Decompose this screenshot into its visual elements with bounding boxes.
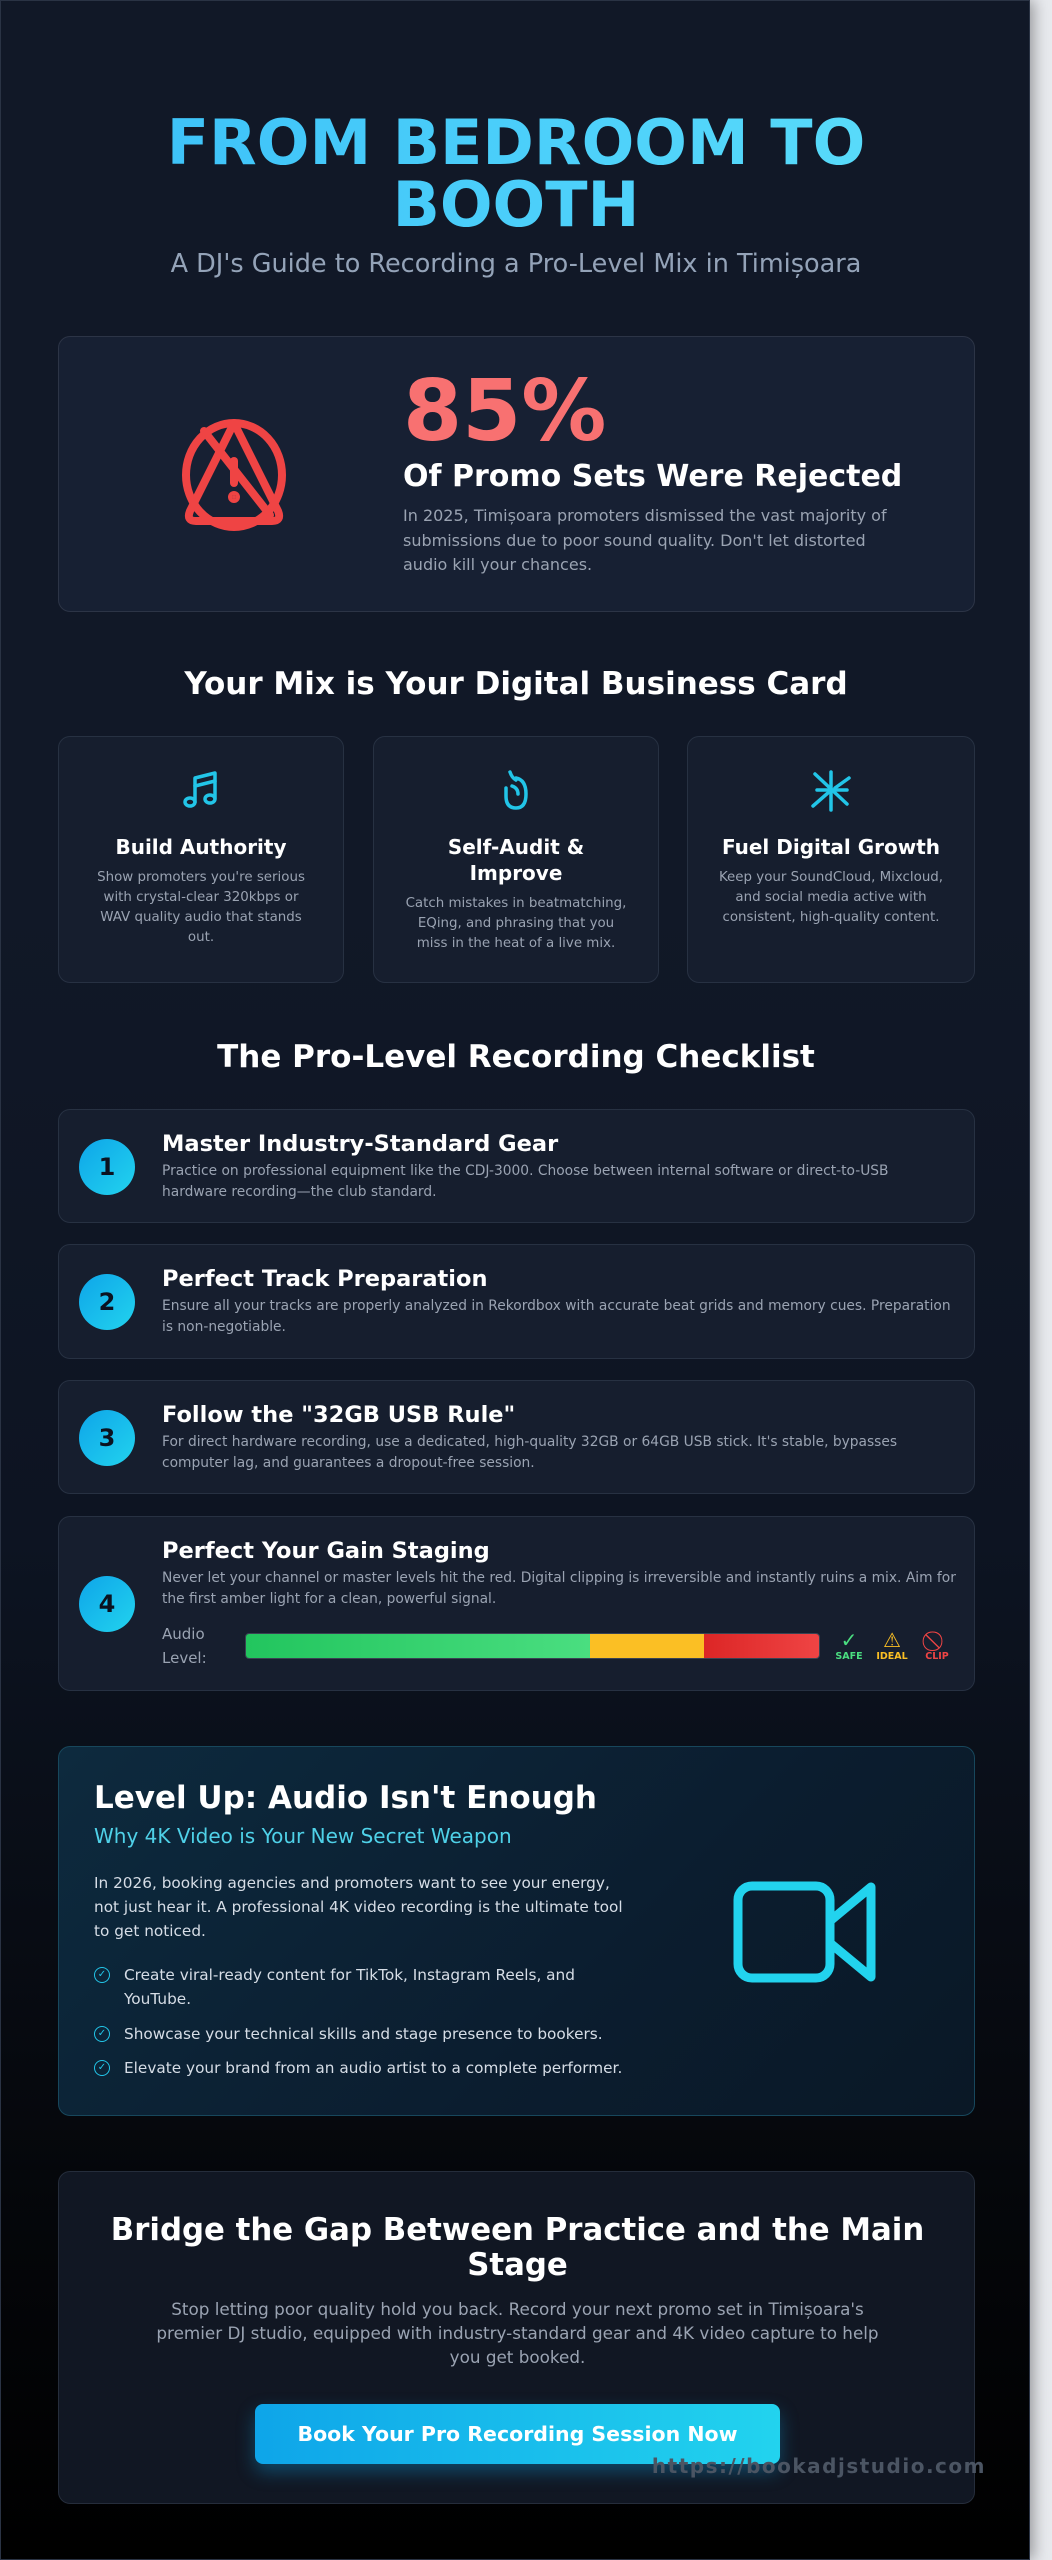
meter legend: CLIP (925, 1651, 949, 1662)
icon: sparkle (811, 770, 851, 812)
card: build authority: Show promoters you're serious with crystal-clear 320kbps or WAV quality audio that stands out. (97, 870, 305, 945)
bullet list: ✓ (98, 2028, 106, 2039)
card: build authority (58, 736, 344, 983)
card: digital growth: Keep your SoundCloud, Mixcloud, and social media active with consistent, high-quality content. (719, 870, 943, 925)
checklist item 2: 2 (99, 1288, 115, 1316)
bullet list: Elevate your brand from an audio artist to a complete performer. (124, 2059, 622, 2077)
footer url: https://bookadjstudio.com (652, 2454, 986, 2478)
checklist item 1 (58, 1109, 975, 1223)
level up heading: Level Up: Audio Isn't Enough (94, 1780, 597, 1816)
checklist item 3: Follow the "32GB USB Rule" (162, 1402, 515, 1428)
icon: hand pointer (504, 770, 528, 810)
card: self-audit: Catch mistakes in beatmatching, EQing, and phrasing that you miss in the heat of a live mix. (406, 896, 626, 951)
checklist item 1: Master Industry-Standard Gear (162, 1131, 558, 1157)
checklist item 3: For direct hardware recording, use a dedicated, high-quality 32GB or 64GB USB stick. It's stable, bypasses computer lag, and guarantees a dropout-free session. (162, 1434, 897, 1471)
bullet list (94, 1966, 622, 2077)
checklist item 1: 1 (99, 1153, 115, 1181)
stat number: 85% (403, 362, 606, 461)
checklist item 4: Never let your channel or master levels hit the red. Digital clipping is irreversible and instantly ruins a mix. Aim for the first amber light for a clean, powerful signal. (162, 1570, 956, 1607)
meter legend: ✓ (841, 1628, 857, 1652)
meter legend: IDEAL (876, 1651, 908, 1662)
card: digital growth (687, 736, 975, 983)
icon: warning triangle with slash (182, 419, 286, 531)
icon: music note (183, 771, 217, 808)
label: audio level (162, 1625, 207, 1667)
subtitle: A DJ's Guide to Recording a Pro-Level Mix in Timișoara (171, 249, 861, 279)
level up subtitle: Why 4K Video is Your New Secret Weapon (94, 1824, 512, 1848)
icon: video camera (734, 1882, 876, 1982)
card: self-audit: Improve (470, 861, 562, 885)
bullet list: Create viral-ready content for TikTok, Instagram Reels, and YouTube. (124, 1966, 575, 2008)
meter legend: ⚠ (883, 1628, 901, 1652)
title: FROM BEDROOM TO (167, 106, 865, 179)
card: digital growth: Fuel Digital Growth (722, 835, 940, 859)
checklist item 3: 3 (99, 1424, 115, 1452)
bullet list: Showcase your technical skills and stage presence to bookers. (124, 2025, 603, 2043)
checklist item 1: Practice on professional equipment like the CDJ-3000. Choose between internal software or direct-to-USB hardware recording—the club standard. (162, 1163, 889, 1200)
heading: checklist: The Pro-Level Recording Checklist (217, 1039, 815, 1075)
checklist item 2: Perfect Track Preparation (162, 1266, 487, 1292)
card: self-audit: Self-Audit & (448, 835, 584, 859)
panel: call to action (58, 2171, 975, 2504)
checklist item 4 (58, 1516, 975, 1691)
bullet list: ✓ (98, 1969, 106, 1980)
bullet list: ✓ (98, 2062, 106, 2073)
panel: level up (58, 1746, 975, 2116)
card: build authority: Build Authority (115, 835, 287, 859)
stat heading: Of Promo Sets Were Rejected (403, 459, 902, 494)
checklist item 4: 4 (99, 1590, 115, 1618)
label: audio level: Audio (162, 1625, 205, 1643)
title (1, 112, 1031, 236)
checklist item 4: Perfect Your Gain Staging (162, 1538, 490, 1564)
level up text: In 2026, booking agencies and promoters want to see your energy, not just hear it. A professional 4K video recording is the ultimate tool to get noticed. (94, 1874, 623, 1940)
level meter bar (245, 1633, 820, 1659)
button (255, 2404, 780, 2464)
checklist item 2 (58, 1244, 975, 1359)
meter legend (835, 1628, 949, 1662)
card: self-audit (373, 736, 659, 983)
heading: business card: Your Mix is Your Digital Business Card (184, 666, 848, 702)
CTA text: Stop letting poor quality hold you back. Record your next promo set in Timișoara's premier DJ studio, equipped with industry-standard gear and 4K video capture to help you get booked. (156, 2299, 879, 2367)
meter legend: SAFE (835, 1651, 863, 1662)
button: Book Your Pro Recording Session Now (297, 2422, 738, 2446)
checklist item 2: Ensure all your tracks are properly analyzed in Rekordbox with accurate beat grids and memory cues. Preparation is non-negotiable. (162, 1298, 951, 1335)
panel: stat (58, 336, 975, 612)
title: BOOTH (393, 168, 639, 241)
stat text: In 2025, Timișoara promoters dismissed the vast majority of submissions due to poor sound quality. Don't let distorted audio kill your chances. (403, 506, 887, 574)
CTA heading: Bridge the Gap Between Practice and the Main Stage (111, 2212, 924, 2283)
label: audio level: Level: (162, 1649, 207, 1667)
checklist item 3 (58, 1380, 975, 1494)
